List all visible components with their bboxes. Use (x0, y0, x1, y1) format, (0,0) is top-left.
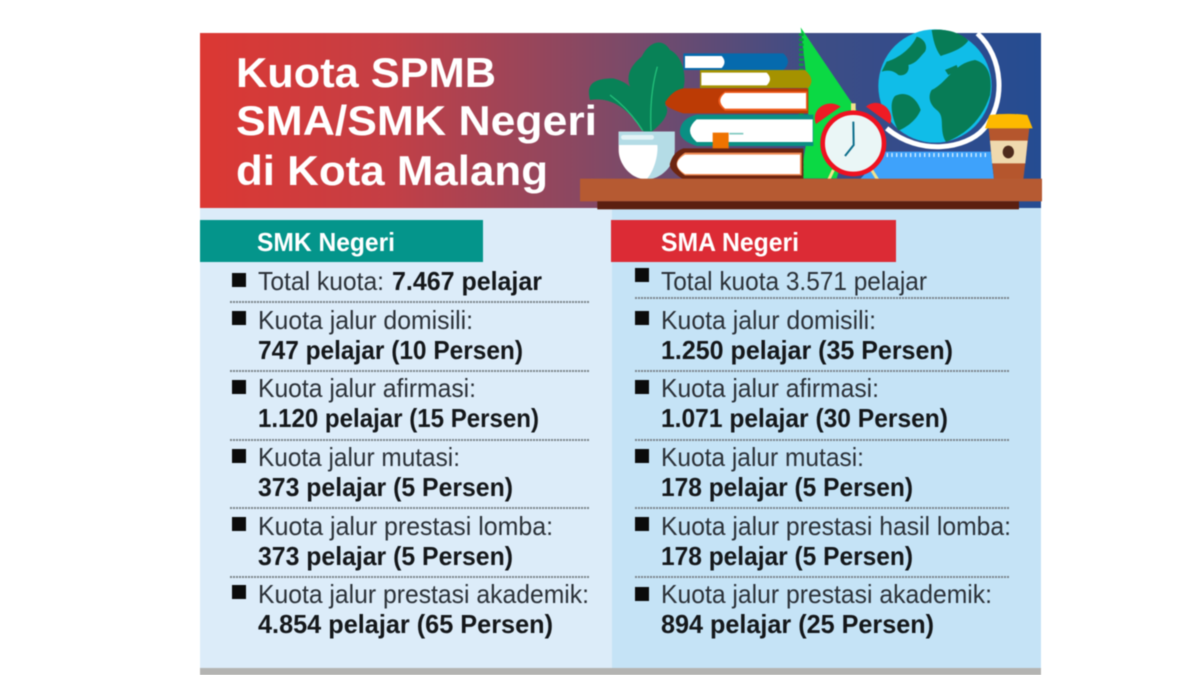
list: SMK quotas: 747 pelajar (10 Persen) (258, 335, 523, 365)
list: SMA quotas: 1.071 pelajar (30 Persen) (661, 403, 948, 433)
list: SMK quotas: Kuota jalur prestasi lomba: (258, 511, 553, 541)
heading: SMK Negeri (200, 220, 483, 262)
icon: coffee cup (985, 114, 1033, 179)
panel: SMA Negeri (611, 220, 1011, 639)
list: SMA quotas: Kuota jalur prestasi akademik: (661, 579, 992, 609)
panel: body background (200, 206, 1041, 675)
icon: potted plant (589, 42, 685, 179)
list: SMK quotas: 4.854 pelajar (65 Persen) (258, 609, 553, 639)
list: SMK quotas: 373 pelajar (5 Persen) (258, 472, 513, 502)
list: SMA quotas: Total kuota 3.571 pelajar (661, 266, 927, 296)
panel: SMK Negeri (200, 220, 589, 639)
list: SMK quotas (230, 266, 589, 639)
list: SMA quotas: Kuota jalur domisili: (661, 305, 876, 335)
heading: SMA Negeri (611, 220, 896, 262)
icon: green set square (801, 27, 857, 178)
list: SMK quotas: 1.120 pelajar (15 Persen) (258, 403, 539, 433)
icon: globe (878, 29, 999, 147)
illustration: shelf with school objects (580, 27, 1042, 209)
list: SMK quotas: Kuota jalur prestasi akademik: (258, 579, 589, 609)
list: SMK quotas: Total kuota: (258, 266, 384, 296)
list: SMA quotas: Kuota jalur mutasi: (661, 442, 864, 472)
list: SMA quotas: 1.250 pelajar (35 Persen) (661, 335, 953, 365)
list: SMA quotas: 178 pelajar (5 Persen) (661, 472, 913, 502)
title: SMA/SMK Negeri (236, 97, 597, 144)
title (236, 49, 597, 194)
panel: header banner (200, 33, 1041, 208)
icon: blue ruler (860, 152, 994, 179)
icon: stack of books (665, 53, 813, 179)
list: SMK quotas: Kuota jalur mutasi: (258, 442, 460, 472)
list: SMA quotas: Kuota jalur prestasi hasil lomba: (661, 511, 1011, 541)
list: SMA quotas: 178 pelajar (5 Persen) (661, 541, 913, 571)
list: SMA quotas: Kuota jalur afirmasi: (661, 373, 879, 403)
list: SMA quotas (635, 266, 1011, 639)
icon: wooden shelf (580, 179, 1042, 209)
list: SMK quotas: Kuota jalur domisili: (258, 305, 473, 335)
heading: SMK Negeri: SMK Negeri (257, 227, 395, 257)
title: di Kota Malang (236, 147, 548, 194)
title: Kuota SPMB (236, 49, 496, 96)
list: SMK quotas: 373 pelajar (5 Persen) (258, 541, 513, 571)
list: SMK quotas: 7.467 pelajar (392, 266, 542, 296)
list: SMA quotas: 894 pelajar (25 Persen) (661, 609, 934, 639)
icon: alarm clock (815, 103, 891, 181)
heading: SMA Negeri: SMA Negeri (661, 227, 799, 257)
list: SMK quotas: Kuota jalur afirmasi: (258, 373, 476, 403)
